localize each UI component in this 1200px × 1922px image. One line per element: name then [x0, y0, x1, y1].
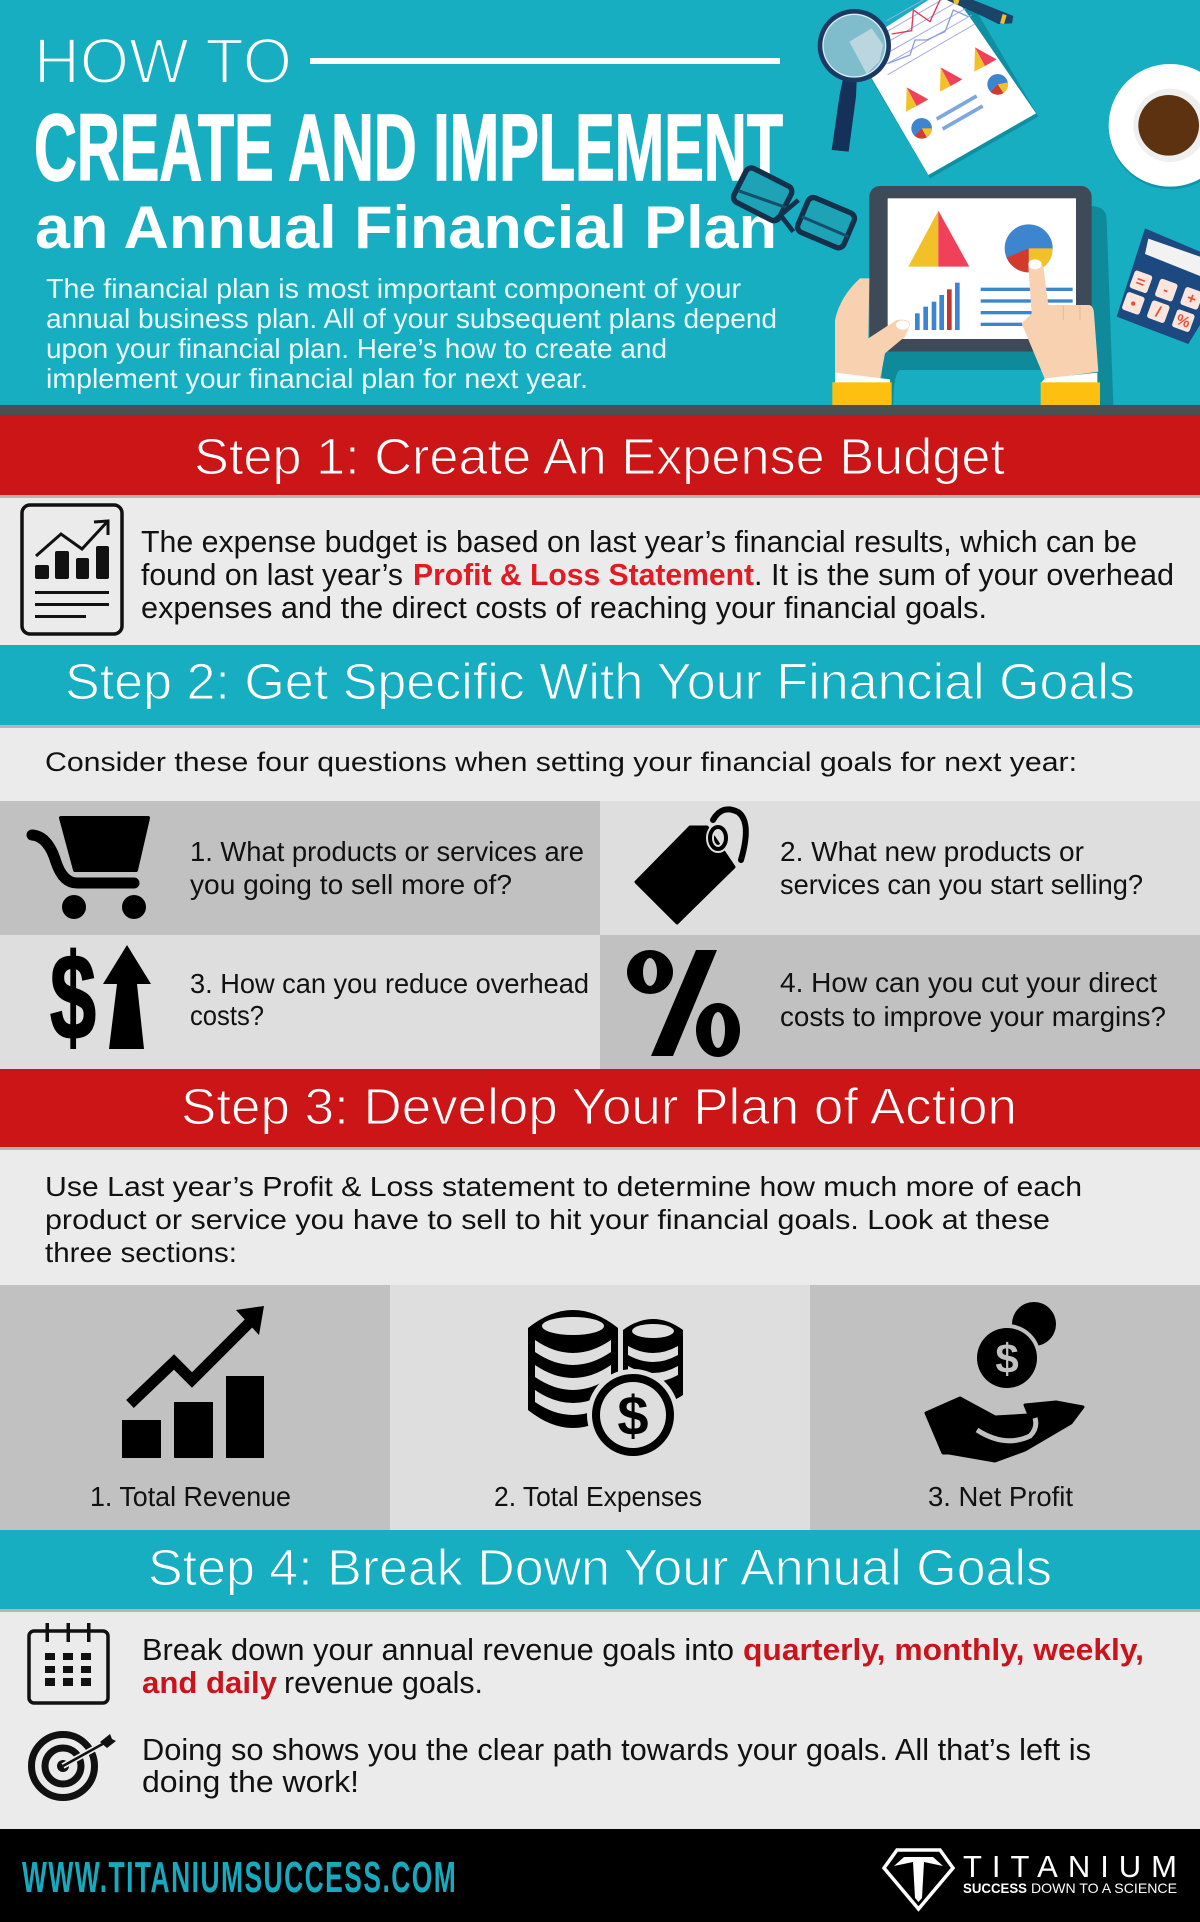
text: step 3 body: three sections: [45, 1237, 237, 1268]
icon: pen [947, 0, 1013, 24]
icon: target with arrow [32, 1734, 116, 1798]
icon: calculator: - [1161, 282, 1171, 299]
text: question 4: 4. How can you cut your direct [780, 967, 1157, 998]
panel: step 4 heading: Step 4: Break Down Your Annual Goals [148, 1539, 1052, 1596]
intro paragraph: The financial plan is most important component of your [46, 273, 741, 304]
text: step 1 body: Profit & Loss Statement [413, 557, 754, 592]
text: question 3: costs? [190, 1000, 264, 1031]
icon: tablet [869, 186, 1092, 352]
text: question 2: services can you start selling? [780, 869, 1143, 900]
text: step 4 second paragraph: Doing so shows you the clear path towards your goals. All that’s left is [142, 1732, 1091, 1767]
text: step 3 body: product or service you have to sell to hit your financial goals. Look at these [45, 1204, 1050, 1235]
text: question 3: 3. How can you reduce overhead [190, 968, 589, 999]
icon: report paper [863, 0, 1038, 178]
panel: header [0, 0, 1200, 415]
text: step 1 body: The expense budget is based on last year’s financial results, which can be [141, 524, 1137, 559]
text: step 1 body: found on last year’s [141, 557, 403, 592]
panel: step 4 heading [0, 1530, 1200, 1612]
panel: step 1 heading [0, 415, 1200, 498]
icon: dollar and up arrow [50, 929, 151, 1065]
icon: report document [22, 505, 122, 634]
text: question 2 [780, 836, 1143, 900]
panel: step 2 heading: Step 2: Get Specific With Your Financial Goals [65, 653, 1135, 710]
intro paragraph [46, 273, 777, 394]
title: create and implement: CREATE AND IMPLEMENT [34, 95, 783, 201]
text: step 4 first paragraph: and daily [142, 1665, 278, 1700]
icon: coin stacks [528, 1310, 683, 1461]
panel: step 2 heading [0, 645, 1200, 728]
panel: net profit [810, 1285, 1200, 1530]
intro paragraph: upon your financial plan. Here’s how to create and [46, 333, 667, 364]
text: question 1: you going to sell more of? [190, 869, 512, 900]
text: question 1 [190, 836, 584, 900]
title: how to: HOW TO [34, 25, 292, 97]
label: total expenses: 2. Total Expenses [494, 1481, 702, 1512]
panel: question 4 [600, 935, 1200, 1069]
icon: right hand [1022, 259, 1100, 405]
title: an annual financial plan: an Annual Financial Plan [35, 194, 777, 261]
text: step 2 intro: Consider these four questions when setting your financial goals for next year: [45, 747, 1077, 777]
panel: step 3 heading: Step 3: Develop Your Plan of Action [181, 1078, 1017, 1135]
icon: calculator: = [1133, 273, 1148, 292]
icon: calculator: • [1128, 295, 1138, 313]
icon: growth chart [122, 1306, 264, 1458]
icon: tablet shadow [880, 206, 1113, 405]
panel: total revenue [0, 1285, 390, 1530]
icon: glasses [731, 166, 856, 250]
text: step 1 body [141, 524, 1174, 625]
icon: coffee cup [1109, 64, 1200, 189]
icon: hand with coins: $ [995, 1335, 1019, 1382]
panel: question 2 [600, 801, 1200, 935]
text: step 1 body: expenses and the direct costs of reaching your financial goals. [141, 590, 987, 625]
intro paragraph: implement your financial plan for next year. [46, 363, 588, 394]
logo: wordmark: DOWN TO A SCIENCE [1031, 1880, 1177, 1896]
website url: WWW.TITANIUMSUCCESS.COM [22, 1852, 456, 1902]
icon: calculator: + [1184, 290, 1199, 309]
text: question 2: 2. What new products or [780, 836, 1084, 867]
icon: calculator [1117, 228, 1200, 344]
header illustration [731, 0, 1200, 405]
text: question 3 [190, 968, 589, 1031]
panel: footer [0, 1829, 1200, 1922]
intro paragraph: annual business plan. All of your subsequent plans depend [46, 303, 777, 334]
icon: coin stacks: $ [617, 1384, 649, 1447]
panel: step 3 heading [0, 1069, 1200, 1150]
text: question 4: costs to improve your margins? [780, 1001, 1166, 1032]
text: question 1: 1. What products or services are [190, 836, 584, 867]
text: question 4 [780, 967, 1166, 1032]
icon: calendar [29, 1623, 108, 1703]
text: step 4 first paragraph [142, 1632, 1144, 1700]
icon: left hand [832, 278, 910, 405]
icon: price tag [636, 809, 746, 923]
icon: dollar and up arrow: $ [50, 929, 96, 1065]
panel: step 1 heading: Step 1: Create An Expense Budget [194, 428, 1005, 485]
text: step 1 body: . It is the sum of your overhead [754, 557, 1174, 592]
logo: diamond mark [884, 1850, 953, 1909]
text: step 4 first paragraph: quarterly, monthly, weekly, [743, 1632, 1144, 1667]
logo: wordmark: TITANIUM [963, 1849, 1177, 1884]
text: step 3 body: Use Last year’s Profit & Loss statement to determine how much more of each [45, 1171, 1082, 1202]
logo: wordmark: SUCCESS [963, 1880, 1027, 1896]
text: step 4 second paragraph: doing the work! [142, 1764, 359, 1799]
panel: total expenses [390, 1285, 810, 1530]
panel: question 1 [0, 801, 600, 935]
icon: magnifier [818, 9, 891, 152]
icon: percent sign [627, 950, 740, 1057]
icon: calculator: % [1174, 311, 1193, 332]
text: step 4 first paragraph: Break down your annual revenue goals into [142, 1632, 734, 1667]
title: how to [34, 25, 780, 97]
panel: question 3 [0, 929, 600, 1069]
label: net profit: 3. Net Profit [928, 1481, 1073, 1512]
text: step 4 first paragraph: revenue goals. [284, 1665, 483, 1700]
icon: calculator: / [1153, 304, 1164, 321]
text: step 4 second paragraph [142, 1732, 1091, 1799]
icon: hand with coins [926, 1302, 1083, 1461]
text: step 3 body [45, 1171, 1082, 1268]
icon: shopping cart [32, 818, 148, 919]
label: total revenue: 1. Total Revenue [90, 1481, 291, 1512]
